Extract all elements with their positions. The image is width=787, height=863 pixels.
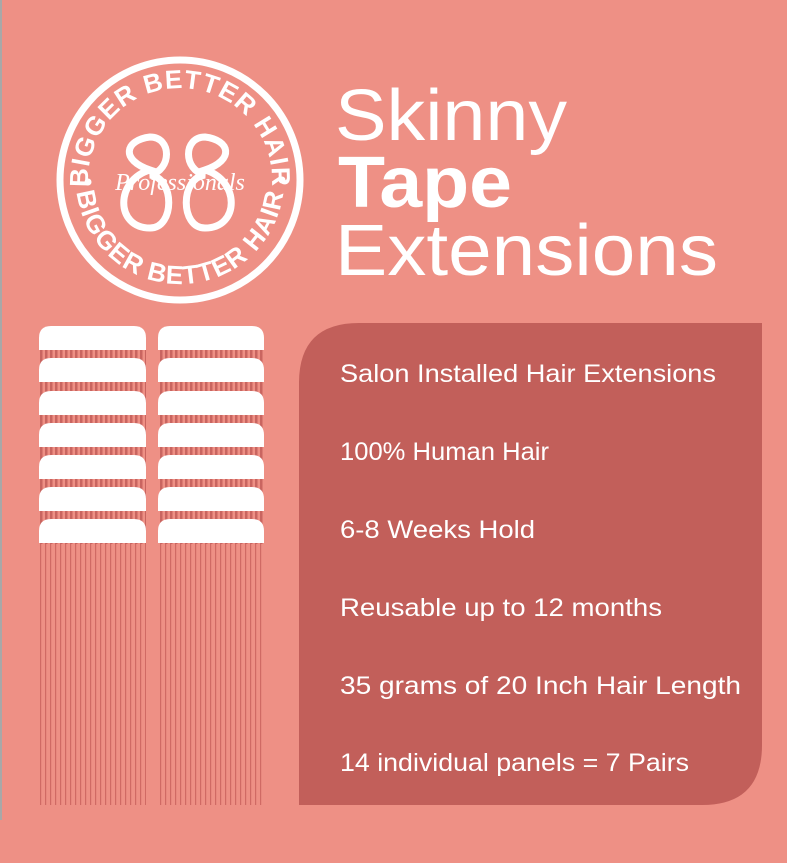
- panel: features: 100% Human Hair: [340, 438, 549, 466]
- title: Tape: [338, 143, 512, 223]
- panel: features: Salon Installed Hair Extensions: [340, 360, 716, 388]
- logo: Bigger Better Hair badge: BIGGER BETTER HAIR: [76, 190, 284, 284]
- panel: features: [299, 323, 762, 805]
- panel: features: 35 grams of 20 Inch Hair Length: [340, 672, 741, 700]
- title: [335, 76, 718, 291]
- title: Extensions: [335, 211, 718, 291]
- illustration: tape extension strips: [39, 326, 264, 805]
- logo: Bigger Better Hair badge: Professionals: [114, 170, 245, 196]
- logo: Bigger Better Hair badge: BIGGER BETTER HAIR: [70, 70, 290, 186]
- logo: Bigger Better Hair badge: [56, 56, 304, 304]
- panel: features: 6-8 Weeks Hold: [340, 516, 535, 544]
- panel: features: Reusable up to 12 months: [340, 594, 662, 622]
- panel: features: 14 individual panels = 7 Pairs: [340, 749, 689, 777]
- title: Skinny: [335, 76, 567, 156]
